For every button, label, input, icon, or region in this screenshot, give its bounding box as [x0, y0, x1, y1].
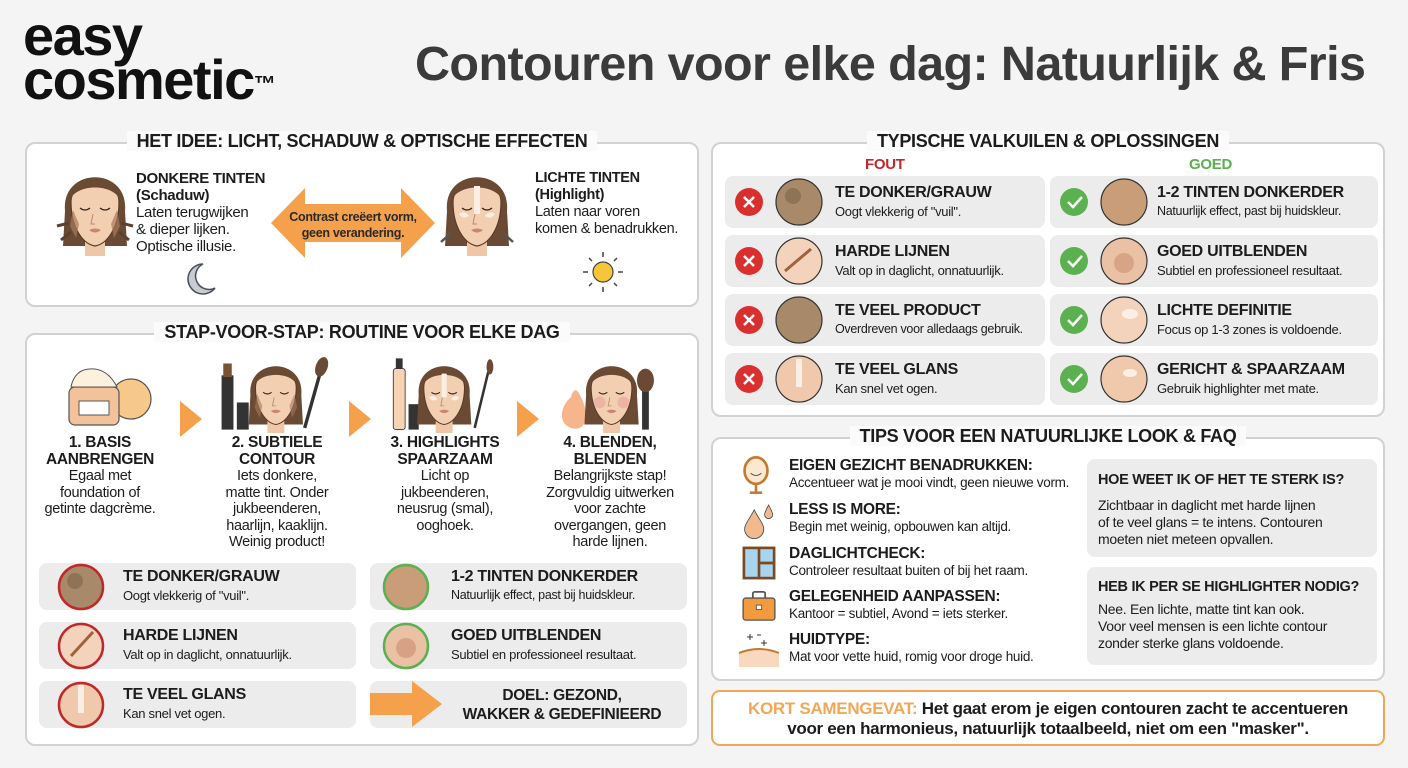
text: step 1 [44, 434, 155, 517]
card: te donker [39, 563, 356, 610]
tip: daglichtcheck: Controleer resultaat buiten of bij het raam. [789, 563, 1028, 578]
tip: less is more [789, 501, 1011, 534]
logo: cosmetic™ [23, 48, 276, 111]
card: goed 1: 1-2 TINTEN DONKERDER [1157, 184, 1344, 201]
tip: less is more: Begin met weinig, opbouwen kan altijd. [789, 519, 1011, 534]
card: fout 1: TE DONKER/GRAUW [835, 184, 991, 201]
text: step 4: harde lijnen. [572, 534, 648, 550]
text: lichte tinten: komen & benadrukken. [535, 221, 678, 237]
card: fout 4 [725, 353, 1045, 405]
tip: gelegenheid: GELEGENHEID AANPASSEN: [789, 588, 1000, 605]
faq: highlighter: Nee. Een lichte, matte tint kan ook. [1098, 601, 1304, 617]
card: goed 1: Natuurlijk effect, past bij huidskleur. [1157, 204, 1341, 218]
panel: valkuilen [711, 142, 1385, 417]
icon: cream jar [68, 368, 152, 426]
text: step 2: 2. SUBTIELE [232, 434, 322, 451]
text: step 3: neusrug (smal), [397, 501, 493, 517]
text: donkere tinten: Laten terugwijken [136, 204, 248, 221]
text: step 2: Weinig product! [229, 534, 325, 550]
card: goed 2: Subtiel en professioneel resultaat. [1157, 263, 1342, 278]
card: goed 3: Focus op 1-3 zones is voldoende. [1157, 322, 1342, 337]
tip: huidtype [789, 631, 1033, 664]
logo: easy [23, 4, 142, 67]
panel: stap voor stap [25, 333, 699, 746]
panel: tips & faq [711, 437, 1385, 681]
faq: te sterk: HOE WEET IK OF HET TE STERK IS? [1098, 472, 1344, 488]
card: goed 2 [1050, 235, 1378, 287]
text: donkere tinten: & dieper lijken. [136, 221, 230, 238]
card: fout 2 [725, 235, 1045, 287]
icon: skin [738, 634, 780, 667]
card: goed 2: GOED UITBLENDEN [1157, 243, 1307, 260]
icon: blending [562, 366, 654, 433]
faq: highlighter: HEB IK PER SE HIGHLIGHTER NODIG? [1098, 579, 1359, 595]
text: donkere tinten: DONKERE TINTEN [136, 170, 265, 187]
text: step 4: 4. BLENDEN, [563, 434, 657, 451]
card: fout 1: Oogt vlekkerig of "vuil". [835, 204, 961, 219]
card: goed 4: Gebruik highlighter met mate. [1157, 381, 1319, 396]
tip: daglichtcheck [789, 545, 1028, 578]
card: te veel glans [39, 681, 356, 728]
faq: te sterk: Zichtbaar in daglicht met harde lijnen [1098, 497, 1315, 513]
label: fout: FOUT [865, 156, 905, 173]
heading: tips: TIPS VOOR EEN NATUURLIJKE LOOK & FAQ [860, 426, 1236, 446]
card: harde lijnen: Valt op in daglicht, onnatuurlijk. [123, 647, 292, 662]
text: step 4: Belangrijkste stap! [554, 468, 666, 484]
icon: mirror [743, 456, 769, 494]
faq: highlighter: Voor veel mensen is een lichte contour [1098, 618, 1327, 634]
icon: contour face [56, 177, 134, 256]
tip: huidtype: HUIDTYPE: [789, 631, 870, 648]
text: step 4 [546, 434, 674, 550]
card: goed 3: LICHTE DEFINITIE [1157, 302, 1292, 319]
title: Contouren voor elke dag: Natuurlijk & Fris [415, 37, 1365, 91]
callout: kort samengevat: KORT SAMENGEVAT: Het gaat erom je eigen contouren zacht te accentueren [748, 699, 1348, 718]
icon: contour tools [222, 357, 328, 433]
text: step 4: voor zachte [574, 501, 646, 517]
tip: eigen gezicht: EIGEN GEZICHT BENADRUKKEN: [789, 457, 1033, 474]
arrow: step 1-2 [180, 401, 202, 437]
text: step 2: jukbeenderen, [233, 501, 321, 517]
arrow: doel: DOEL: GEZOND, [502, 687, 622, 704]
text: lichte tinten: (Highlight) [535, 187, 604, 203]
arrow: contrast: geen verandering. [302, 226, 404, 240]
text: step 3: Licht op [421, 468, 469, 484]
text: step 4: Zorgvuldig uitwerken [546, 484, 674, 500]
callout: kort samengevat: voor een harmonieus, natuurlijk totaalbeeld, niet om een "masker". [787, 719, 1309, 738]
text: step 1: AANBRENGEN [46, 450, 154, 468]
card: goed 3 [1050, 294, 1378, 346]
card: fout 2: Valt op in daglicht, onnatuurlijk. [835, 263, 1004, 278]
faq: highlighter [1087, 567, 1377, 665]
card: 1-2 tinten [370, 563, 687, 610]
text: step 2 [226, 434, 328, 550]
text: step 3: ooghoek. [416, 518, 474, 534]
arrow: contrast: Contrast creëert vorm, [289, 210, 417, 224]
icon: moon [187, 263, 216, 295]
text: step 3: 3. HIGHLIGHTS [391, 434, 499, 451]
faq: te sterk [1087, 459, 1377, 557]
icon: window [742, 546, 776, 580]
card: fout 4: Kan snel vet ogen. [835, 381, 937, 396]
logo [23, 4, 276, 111]
text: step 1: getinte dagcrème. [44, 501, 155, 517]
callout: kort samengevat [711, 690, 1385, 746]
card: goed uitblenden: Subtiel en professioneel resultaat. [451, 647, 636, 662]
card: fout 3 [725, 294, 1045, 346]
icon: highlight tools [392, 358, 494, 433]
card: te veel glans: Kan snel vet ogen. [123, 706, 225, 721]
card: goed 1 [1050, 176, 1378, 228]
text: donkere tinten: Optische illusie. [136, 238, 236, 255]
card: goed 4: GERICHT & SPAARZAAM [1157, 361, 1345, 378]
faq: te sterk: moeten niet meteen opvallen. [1098, 531, 1273, 547]
tip: gelegenheid [789, 588, 1008, 621]
tip: less is more: LESS IS MORE: [789, 501, 901, 518]
panel: het idee [25, 142, 699, 307]
icon: drops [744, 504, 773, 539]
card: fout 3: Overdreven voor alledaags gebruik. [835, 322, 1023, 336]
card: harde lijnen [39, 622, 356, 669]
card: goed uitblenden [370, 622, 687, 669]
heading: valkuilen: TYPISCHE VALKUILEN & OPLOSSINGEN [877, 131, 1219, 151]
card: goed uitblenden: GOED UITBLENDEN [451, 627, 601, 644]
card: fout 2: HARDE LIJNEN [835, 243, 950, 260]
arrow: step 2-3 [349, 401, 371, 437]
text: donkere tinten [136, 170, 265, 255]
text: step 1: 1. BASIS [69, 434, 131, 451]
card: fout 1 [725, 176, 1045, 228]
heading: stap voor stap: STAP-VOOR-STAP: ROUTINE VOOR ELKE DAG [164, 322, 560, 342]
card: te veel glans: TE VEEL GLANS [123, 686, 246, 703]
faq: highlighter: zonder sterke glans voldoende. [1098, 635, 1284, 651]
icon: sun [583, 252, 623, 292]
text: step 3: SPAARZAAM [397, 450, 493, 468]
card: goed 4 [1050, 353, 1378, 405]
card: te donker: Oogt vlekkerig of "vuil". [123, 588, 249, 603]
text: step 3: jukbeenderen, [401, 484, 489, 500]
tip: huidtype: Mat voor vette huid, romig voor droge huid. [789, 649, 1033, 664]
arrow: step 3-4 [517, 401, 539, 437]
text: step 1: Egaal met [69, 468, 131, 484]
text: step 2: Iets donkere, [237, 468, 317, 484]
text: step 2: haarlijn, kaaklijn. [226, 518, 328, 534]
text: lichte tinten: Laten naar voren [535, 204, 640, 220]
card: fout 3: TE VEEL PRODUCT [835, 302, 980, 319]
text: step 2: matte tint. Onder [226, 484, 328, 500]
arrow: doel [370, 681, 687, 728]
card: 1-2 tinten: 1-2 TINTEN DONKERDER [451, 568, 638, 585]
text: step 4: BLENDEN [574, 450, 646, 468]
text: step 4: overgangen, geen [554, 518, 666, 534]
label: goed: GOED [1189, 156, 1232, 173]
icon: highlight face [440, 177, 514, 256]
text: step 3 [390, 434, 500, 534]
icon: briefcase [742, 591, 776, 621]
text: step 2: CONTOUR [239, 450, 315, 468]
text: lichte tinten: LICHTE TINTEN [535, 170, 640, 186]
faq: te sterk: of te veel glans = te intens. Contouren [1098, 514, 1323, 530]
text: step 1: foundation of [60, 484, 140, 500]
text: lichte tinten [535, 170, 678, 237]
tip: daglichtcheck: DAGLICHTCHECK: [789, 545, 925, 562]
tip: eigen gezicht [789, 457, 1069, 490]
tip: gelegenheid: Kantoor = subtiel, Avond = iets sterker. [789, 606, 1008, 621]
card: te donker: TE DONKER/GRAUW [123, 568, 279, 585]
card: 1-2 tinten: Natuurlijk effect, past bij huidskleur. [451, 588, 635, 602]
card: fout 4: TE VEEL GLANS [835, 361, 958, 378]
arrow: doel: WAKKER & GEDEFINIEERD [463, 706, 661, 723]
tip: eigen gezicht: Accentueer wat je mooi vindt, geen nieuwe vorm. [789, 475, 1069, 490]
arrow: contrast [271, 188, 435, 258]
heading: het idee: HET IDEE: LICHT, SCHADUW & OPTISCHE EFFECTEN [137, 131, 587, 151]
card: harde lijnen: HARDE LIJNEN [123, 627, 238, 644]
text: donkere tinten: (Schaduw) [136, 187, 209, 204]
